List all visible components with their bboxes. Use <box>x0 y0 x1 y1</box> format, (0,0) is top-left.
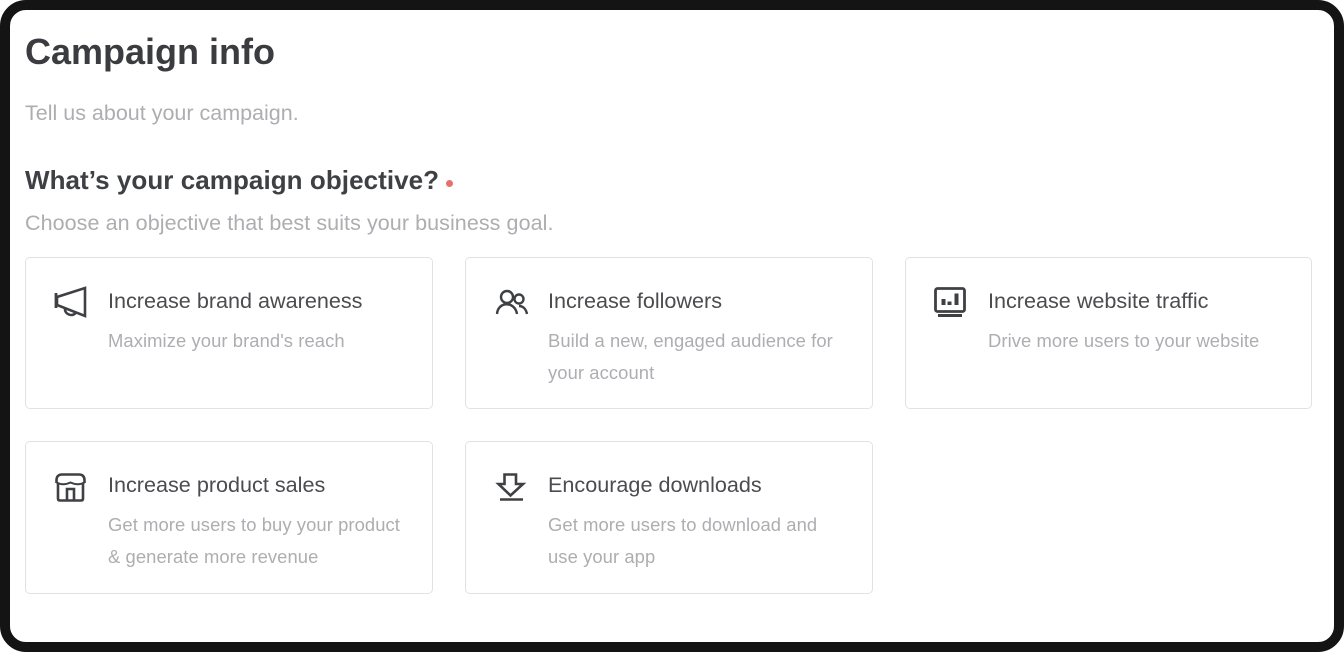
card: website traffic <box>905 257 1312 409</box>
icon: megaphone <box>54 286 86 318</box>
icon: store <box>55 473 86 502</box>
option description: Get more users to download and <box>548 514 817 535</box>
card: brand awareness <box>25 257 433 409</box>
card: product sales <box>25 441 433 594</box>
option description <box>548 514 817 567</box>
option description <box>548 330 833 383</box>
icon: people <box>496 290 528 314</box>
icon: download <box>495 473 526 501</box>
option title: Increase followers <box>548 288 722 313</box>
icon: monitor chart <box>934 287 966 317</box>
option description: your account <box>548 362 654 382</box>
option description: & generate more revenue <box>108 546 318 566</box>
card: followers <box>465 257 873 409</box>
option description: use your app <box>548 546 655 566</box>
option description: Get more users to buy your product <box>108 514 400 535</box>
option description: Build a new, engaged audience for <box>548 330 833 351</box>
option description <box>108 514 400 567</box>
required marker <box>446 180 453 187</box>
option title: Increase product sales <box>108 472 325 497</box>
helper text: Choose an objective that best suits your business goal. <box>25 211 554 235</box>
option title: Encourage downloads <box>548 472 762 497</box>
subtitle: Tell us about your campaign. <box>25 101 299 125</box>
option title: Increase brand awareness <box>108 288 362 313</box>
option description: Maximize your brand's reach <box>108 330 345 351</box>
question heading: What’s your campaign objective? <box>25 165 439 195</box>
option description: Drive more users to your website <box>988 330 1259 351</box>
card: downloads <box>465 441 873 594</box>
title: Campaign info <box>25 31 275 72</box>
option title: Increase website traffic <box>988 288 1208 313</box>
